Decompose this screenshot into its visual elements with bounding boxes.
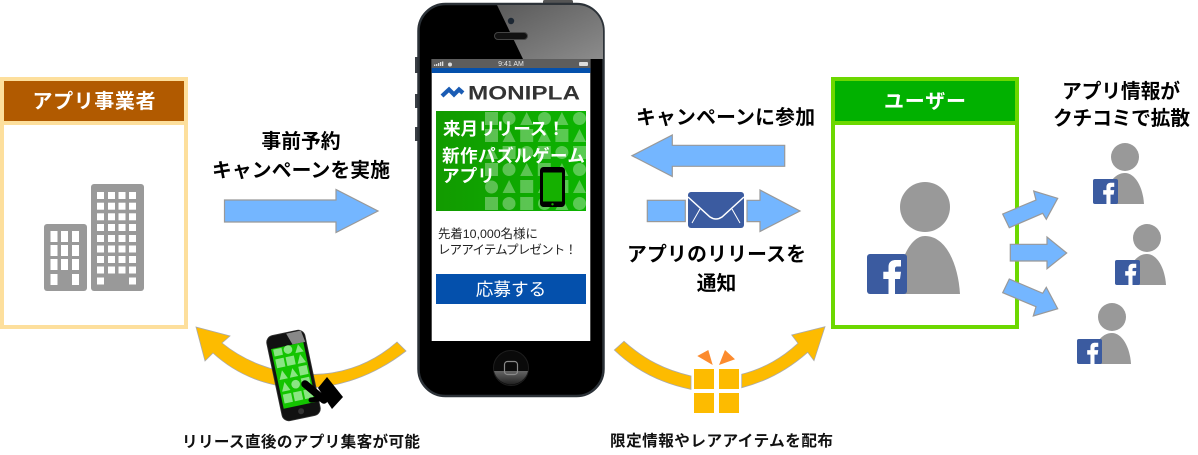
arrow: user to phone [632,135,785,176]
caption: release acquisition: リリース直後のアプリ集客が可能 [182,432,420,451]
heading: release notification: アプリのリリースを [627,244,806,266]
button: apply: 応募する [476,280,546,300]
icon: office buildings [44,184,144,291]
icon: friend 1 [1093,143,1144,204]
banner: game release: 来月リリース！ [443,119,565,139]
heading: join campaign: キャンペーンに参加 [636,107,815,129]
heading: pre-registration campaign: キャンペーンを実施 [212,160,390,182]
banner: game release: 新作パズルゲーム [442,146,585,166]
panel: user [833,79,1017,327]
phone home button [494,350,528,386]
campaign text [438,226,577,257]
logo: MONIPLA: MONIPLA [468,83,580,104]
icon: friend 3 [1077,303,1131,364]
icon: hand [305,377,343,409]
icon: gift box [694,350,739,413]
curved arrow: to app business [196,327,406,388]
status bar: 9:41 AM [498,61,524,68]
campaign text: レアアイテムプレゼント！ [438,243,577,257]
icon: friend 2 [1115,224,1166,285]
heading: release notification: 通知 [697,273,736,295]
panel header: app business: アプリ事業者 [32,90,156,113]
button: apply [436,274,586,304]
panel header: app business [4,81,184,121]
icon: small smartphone with tapping hand [265,329,343,422]
heading: release notification [627,244,806,295]
logo: MONIPLA [442,83,580,104]
status bar [432,59,590,68]
icon: envelope [688,192,744,228]
curved arrow: to user with gift [614,327,825,413]
phone camera [508,18,514,24]
icon: banner smartphone [540,167,565,207]
banner: game release: アプリ [442,166,495,186]
phone screen [432,59,590,341]
panel header: user: ユーザー [884,90,966,113]
caption: limited information: 限定情報やレアアイテムを配布 [610,431,833,450]
heading: pre-registration campaign [212,131,390,182]
campaign text: 先着10,000名様に [438,226,538,241]
heading: word of mouth: アプリ情報が [1062,80,1180,103]
icon: user with Facebook badge [867,182,960,294]
heading: pre-registration campaign: 事前予約 [261,131,341,153]
arrow with envelope: notification [647,190,800,232]
panel: app business [2,79,186,327]
heading: word of mouth: クチコミで拡散 [1053,108,1190,130]
banner: game release [436,111,586,211]
phone earpiece [494,32,528,40]
arrow: business to phone [224,190,378,232]
panel header: user [835,81,1015,121]
heading: word of mouth [1053,80,1190,130]
phone: main device [415,0,604,396]
arrows: spreading to friends [1003,191,1067,316]
